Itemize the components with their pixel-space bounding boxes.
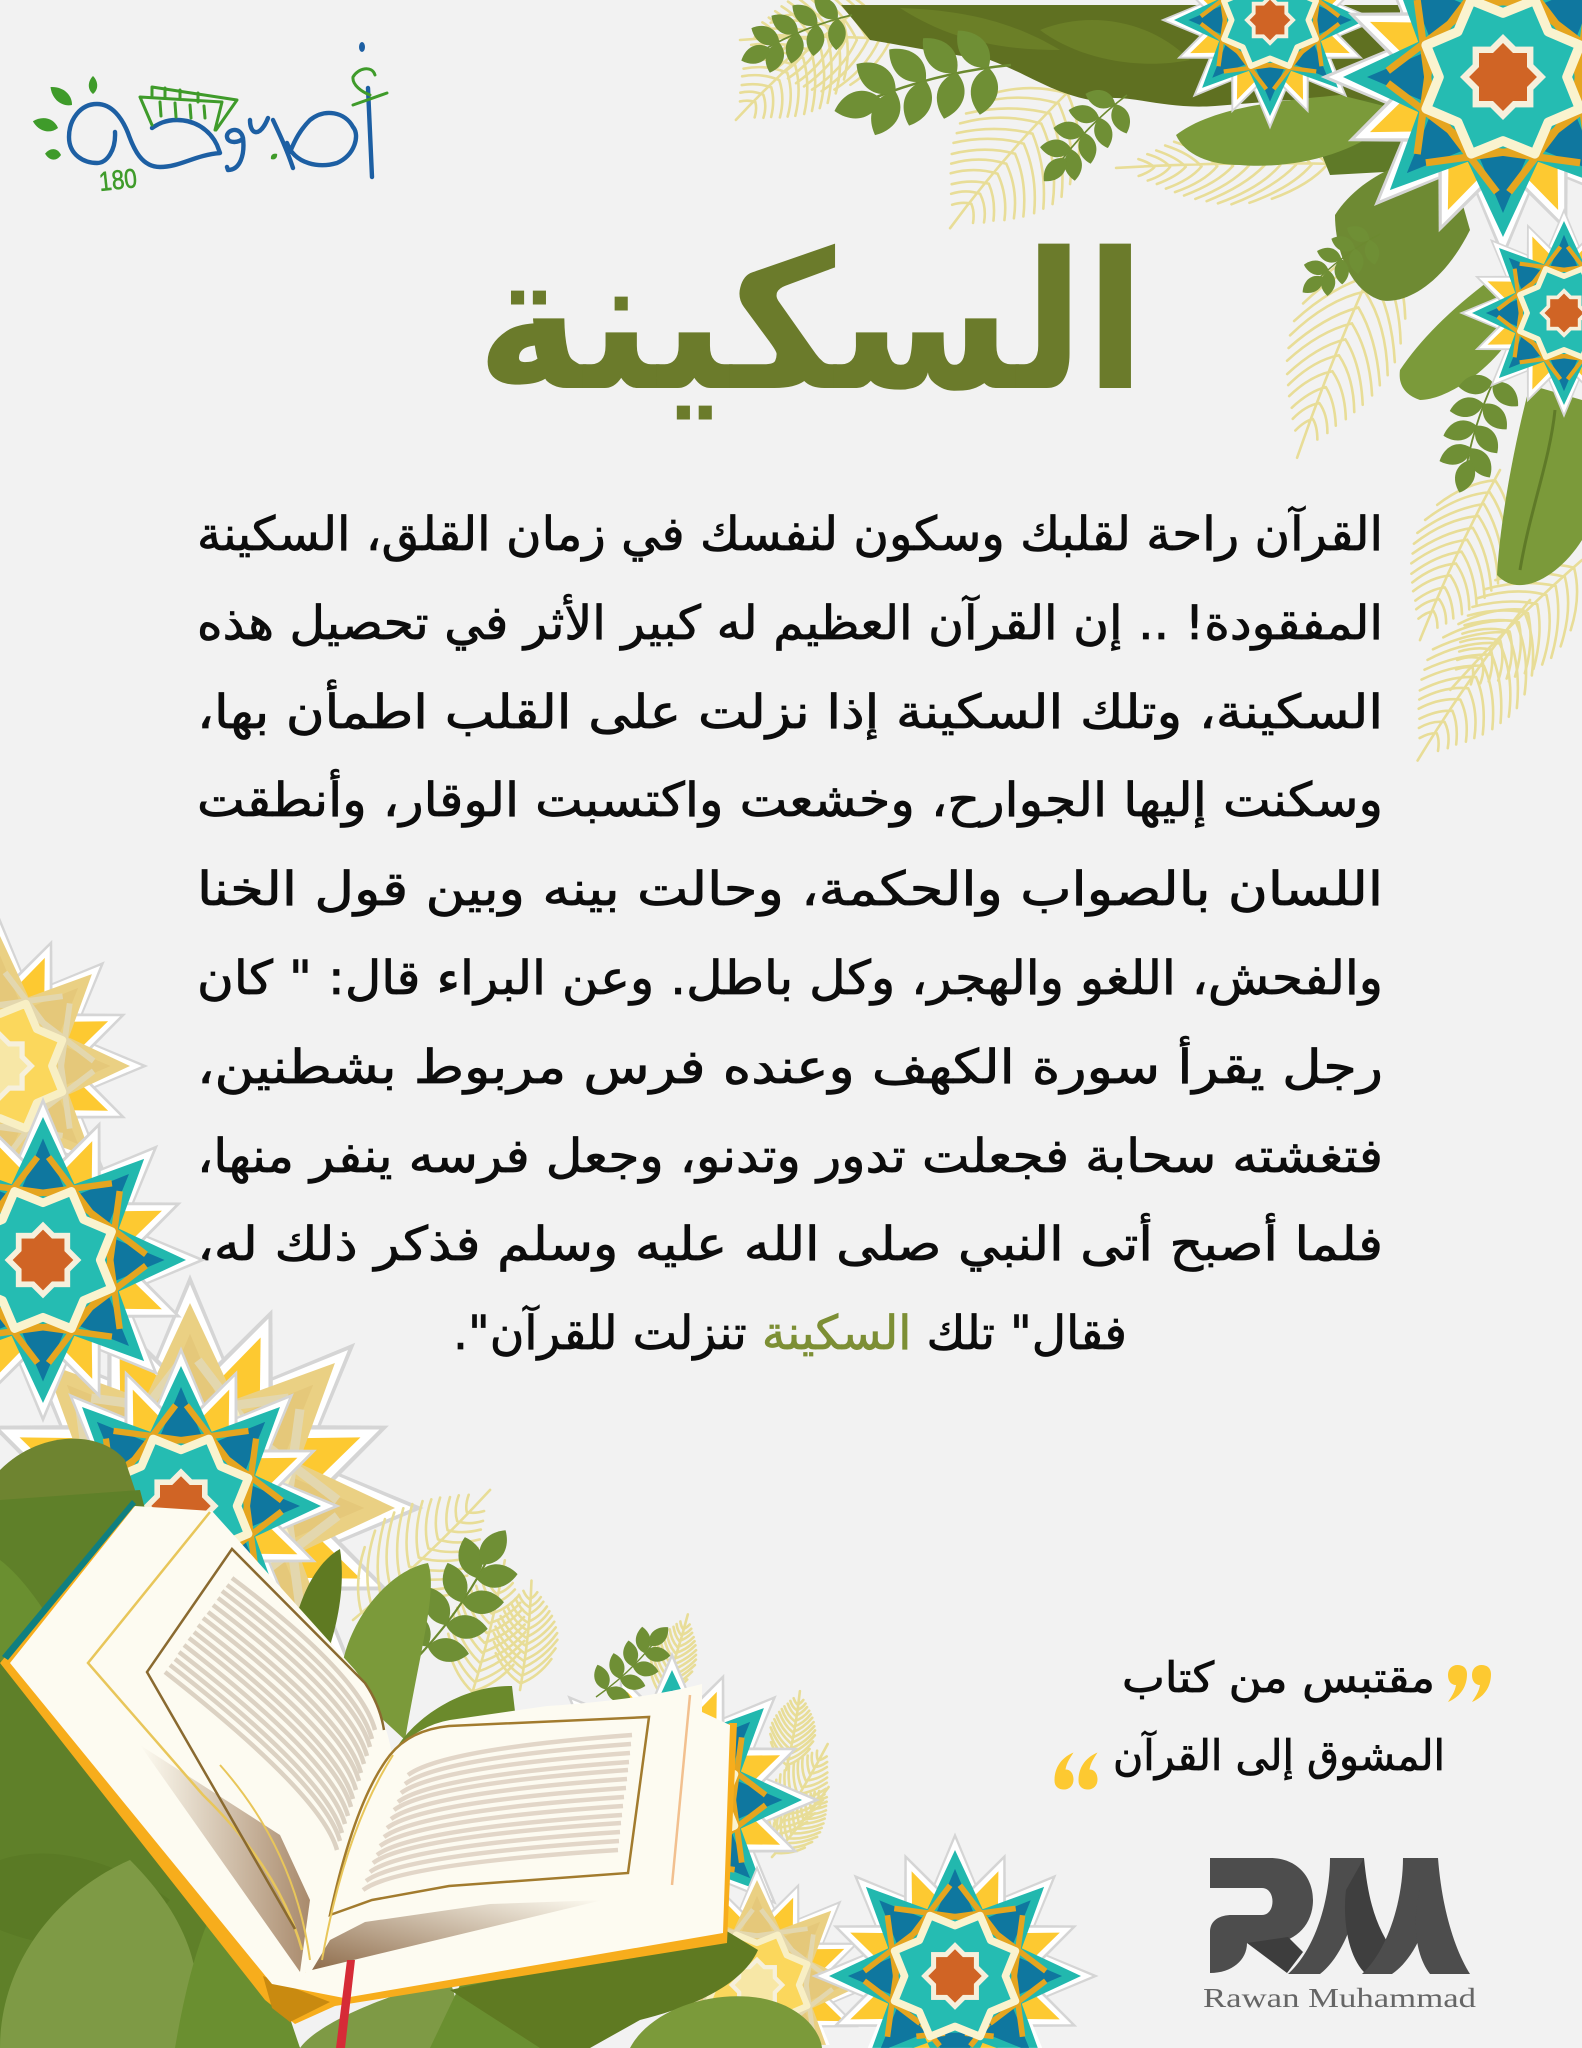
dark olive foliage <box>841 5 1400 110</box>
left page <box>10 1506 392 1973</box>
page borders <box>88 1512 690 1960</box>
vines top <box>728 0 1531 503</box>
palm fronds top <box>702 0 1582 790</box>
body text: فلما أصبح أتى النبي صلى الله عليه وسلم فذكر ذلك له، <box>197 1213 1383 1272</box>
star: bottom right <box>805 1826 1105 2048</box>
green leaves right side <box>1176 95 1582 585</box>
title: السكينة <box>476 212 1146 433</box>
body text: وسكنت إليها الجوارح، وخشعت واكتسبت الوقار، وأنطقت <box>197 769 1383 828</box>
right page <box>263 1684 730 1998</box>
decoration: bottom fronds, vines and stars <box>318 1453 1105 2048</box>
body text: السكينة، وتلك السكينة إذا نزلت على القلب اطمأن بها، <box>197 679 1383 740</box>
quote text: المشوق إلى القرآن <box>1113 1730 1445 1781</box>
logo green strokes <box>140 69 387 130</box>
book cover <box>0 1502 737 2024</box>
star: faded bottom <box>632 1860 882 2048</box>
body text: القرآن راحة لقلبك وسكون لنفسك في زمان القلق، السكينة <box>197 505 1383 562</box>
right page text lines <box>363 1735 632 1890</box>
decoration: left stars <box>0 911 434 1752</box>
star: top small <box>1156 0 1384 134</box>
foliage around book <box>0 1439 822 2048</box>
star: left large <box>0 1090 213 1430</box>
quote text <box>1113 1653 1445 1781</box>
logo sun rays <box>31 42 365 161</box>
palm fronds bottom <box>318 1453 850 1871</box>
star: faded behind lower <box>0 1264 434 1752</box>
body text: والفحش، اللغو والهجر، وكل باطل. وعن البراء قال: " كان <box>197 951 1383 1006</box>
body text: المفقودة! .. إن القرآن العظيم له كبير الأثر في تحصيل هذه <box>197 593 1383 651</box>
body text: فقال" تلك السكينة تنزلت للقرآن". <box>453 1304 1127 1361</box>
body text: اللسان بالصواب والحكمة، وحالت بينه وبين قول الخنا <box>197 862 1383 917</box>
opening quote mark <box>1054 1752 1098 1790</box>
vines bottom <box>381 1507 689 1719</box>
star: faded upper left <box>0 911 155 1221</box>
star: behind book right <box>517 1645 827 1955</box>
left page text lines <box>165 1578 375 1850</box>
quote attribution <box>1054 1653 1491 1790</box>
ribbon <box>336 1960 355 2048</box>
closing quote mark <box>1448 1665 1491 1702</box>
page shadows <box>140 1745 603 1972</box>
body text: فتغشته سحابة فجعلت تدور وتدنو، وجعل فرسه ينفر منها، <box>197 1129 1383 1184</box>
body text: رجل يقرأ سورة الكهف وعنده فرس مربوط بشطنين، <box>197 1036 1383 1095</box>
decoration: top right corner foliage and stars <box>702 0 1582 790</box>
author name: Rawan Muhammad <box>1203 1983 1477 2013</box>
star: top right large <box>1312 0 1582 268</box>
logo: Osbouha 180 <box>31 42 387 197</box>
RM mark <box>1210 1858 1470 1974</box>
logo number: 180 <box>97 163 138 197</box>
quote text: مقتبس من كتاب <box>1122 1653 1435 1702</box>
star: left lower <box>14 1339 348 1673</box>
open book <box>0 1500 737 2048</box>
logo blue strokes <box>69 88 372 177</box>
author logo: Rawan Muhammad <box>1203 1858 1477 2013</box>
body text <box>197 505 1383 1361</box>
star: right <box>1454 203 1582 423</box>
